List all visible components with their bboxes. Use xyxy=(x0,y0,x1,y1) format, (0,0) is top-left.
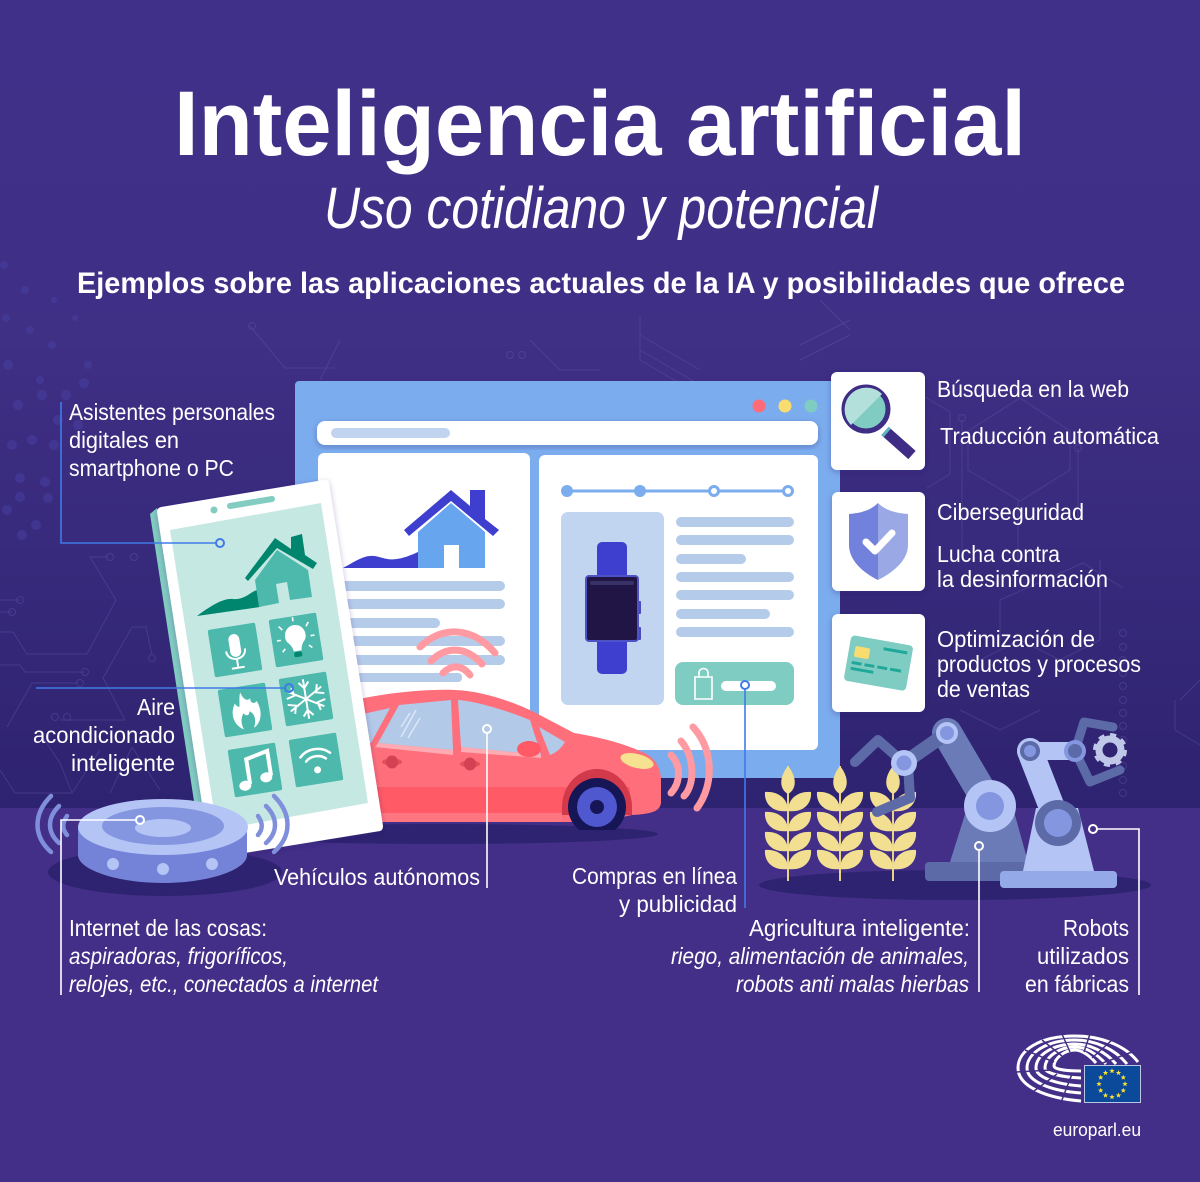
label: disinformation: Lucha contra xyxy=(937,541,1060,567)
window control dots xyxy=(752,400,818,412)
website: europarl.eu xyxy=(1053,1120,1141,1140)
callout: smart agriculture: riego, alimentación de animales, xyxy=(671,943,969,969)
icon: house xyxy=(343,490,499,568)
floor band xyxy=(0,808,1200,1182)
label: sales optimisation: productos y procesos xyxy=(937,651,1141,677)
callout: factory robots: en fábricas xyxy=(1025,971,1129,997)
callout: personal assistants: Asistentes personales xyxy=(69,399,275,425)
callout: internet of things xyxy=(61,816,379,997)
address bar xyxy=(317,421,818,445)
illustration: light robot arm xyxy=(1000,722,1125,888)
callout: online shopping xyxy=(572,681,749,917)
icon: credit card xyxy=(843,635,914,691)
illustration: dark robot arm xyxy=(855,722,1030,881)
text lines xyxy=(340,581,505,682)
hemicycle xyxy=(1018,1036,1138,1101)
phone screen xyxy=(170,503,368,830)
callout: smart air conditioning: Aire xyxy=(137,694,175,720)
icon: app light bulb xyxy=(269,613,323,667)
label: sales optimisation: Optimización de xyxy=(937,626,1095,652)
callout: autonomous vehicles: Vehículos autónomos xyxy=(274,864,480,890)
icon: car sensor waves xyxy=(671,727,709,808)
callout: personal assistants xyxy=(61,399,275,547)
icon: app wifi xyxy=(289,733,343,787)
wheel xyxy=(562,769,632,836)
panel: home page card xyxy=(318,453,530,753)
card: cybersecurity xyxy=(832,492,925,591)
icon: shield xyxy=(849,503,908,580)
icon: signal waves xyxy=(38,796,288,852)
title: Inteligencia artificial xyxy=(174,73,1026,175)
callout: internet of things: relojes, etc., conectados a internet xyxy=(69,971,379,997)
icon: app flame xyxy=(218,683,272,737)
callout: online shopping: y publicidad xyxy=(619,891,737,917)
card: sales xyxy=(832,614,925,712)
text lines xyxy=(676,517,794,637)
callout: smart agriculture xyxy=(671,842,983,997)
speaker and camera xyxy=(210,499,272,514)
progress slider xyxy=(561,485,792,497)
background circuit pattern xyxy=(0,300,1200,796)
callout: internet of things: Internet de las cosas: xyxy=(69,915,267,941)
label: web search: Búsqueda en la web xyxy=(937,376,1129,402)
card: search xyxy=(831,372,925,470)
callout: smart air conditioning: inteligente xyxy=(71,750,175,776)
icon: magnifying glass xyxy=(844,387,912,455)
icon: app music note xyxy=(228,743,282,797)
panel: browser window xyxy=(295,381,840,778)
callout: smart air conditioning: acondicionado xyxy=(33,722,175,748)
callout: smart agriculture: Agricultura inteligente: xyxy=(749,915,970,941)
ground shadow: farm robots xyxy=(759,870,1151,900)
callout: autonomous vehicles xyxy=(274,725,491,890)
icon: gear xyxy=(1095,735,1125,765)
illustration: red car xyxy=(362,690,661,830)
logo: European Parliament xyxy=(1015,1034,1140,1105)
callout: personal assistants: smartphone o PC xyxy=(69,455,234,481)
icon: app snowflake xyxy=(279,672,333,726)
EU flag xyxy=(1084,1066,1140,1102)
callout: factory robots: utilizados xyxy=(1037,943,1129,969)
car windows xyxy=(345,700,565,758)
headlight xyxy=(619,750,655,772)
illustration: robot vacuum xyxy=(38,796,288,896)
shopping button xyxy=(675,662,794,705)
background xyxy=(0,0,1200,808)
EU stars xyxy=(1096,1068,1128,1099)
hemicycle aisles xyxy=(1015,1034,1132,1105)
icon: car wifi signal xyxy=(420,632,495,675)
label: cybersecurity: Ciberseguridad xyxy=(937,499,1084,525)
callout: personal assistants: digitales en xyxy=(69,427,179,453)
icon: app microphone xyxy=(208,623,262,677)
label: sales optimisation xyxy=(937,626,1141,702)
callout: factory robots xyxy=(1025,825,1139,997)
icon: phone house xyxy=(197,534,317,616)
icon: smartwatch xyxy=(586,542,641,674)
product image panel xyxy=(561,512,664,705)
callout: factory robots: Robots xyxy=(1063,915,1129,941)
label: sales optimisation: de ventas xyxy=(937,676,1030,702)
callout: internet of things: aspiradoras, frigoríficos, xyxy=(69,943,288,969)
heading: Ejemplos sobre las aplicaciones actuales de la IA y posibilidades que ofrece xyxy=(77,267,1125,300)
label: machine translation: Traducción automática xyxy=(940,423,1159,449)
subtitle: Uso cotidiano y potencial xyxy=(324,176,880,241)
callout: smart air conditioning xyxy=(33,684,293,776)
ground shadow: car xyxy=(222,824,658,844)
decorative dot field xyxy=(0,261,92,540)
panel: shop product card xyxy=(539,455,818,750)
callout: smart agriculture: robots anti malas hierbas xyxy=(736,971,969,997)
callout: online shopping: Compras en línea xyxy=(572,863,737,889)
illustration: smartphone xyxy=(150,480,383,860)
door handles and mirror xyxy=(382,741,541,770)
label: disinformation xyxy=(937,541,1108,592)
label: disinformation: la desinformación xyxy=(937,566,1108,592)
icon: wheat field xyxy=(765,766,916,881)
